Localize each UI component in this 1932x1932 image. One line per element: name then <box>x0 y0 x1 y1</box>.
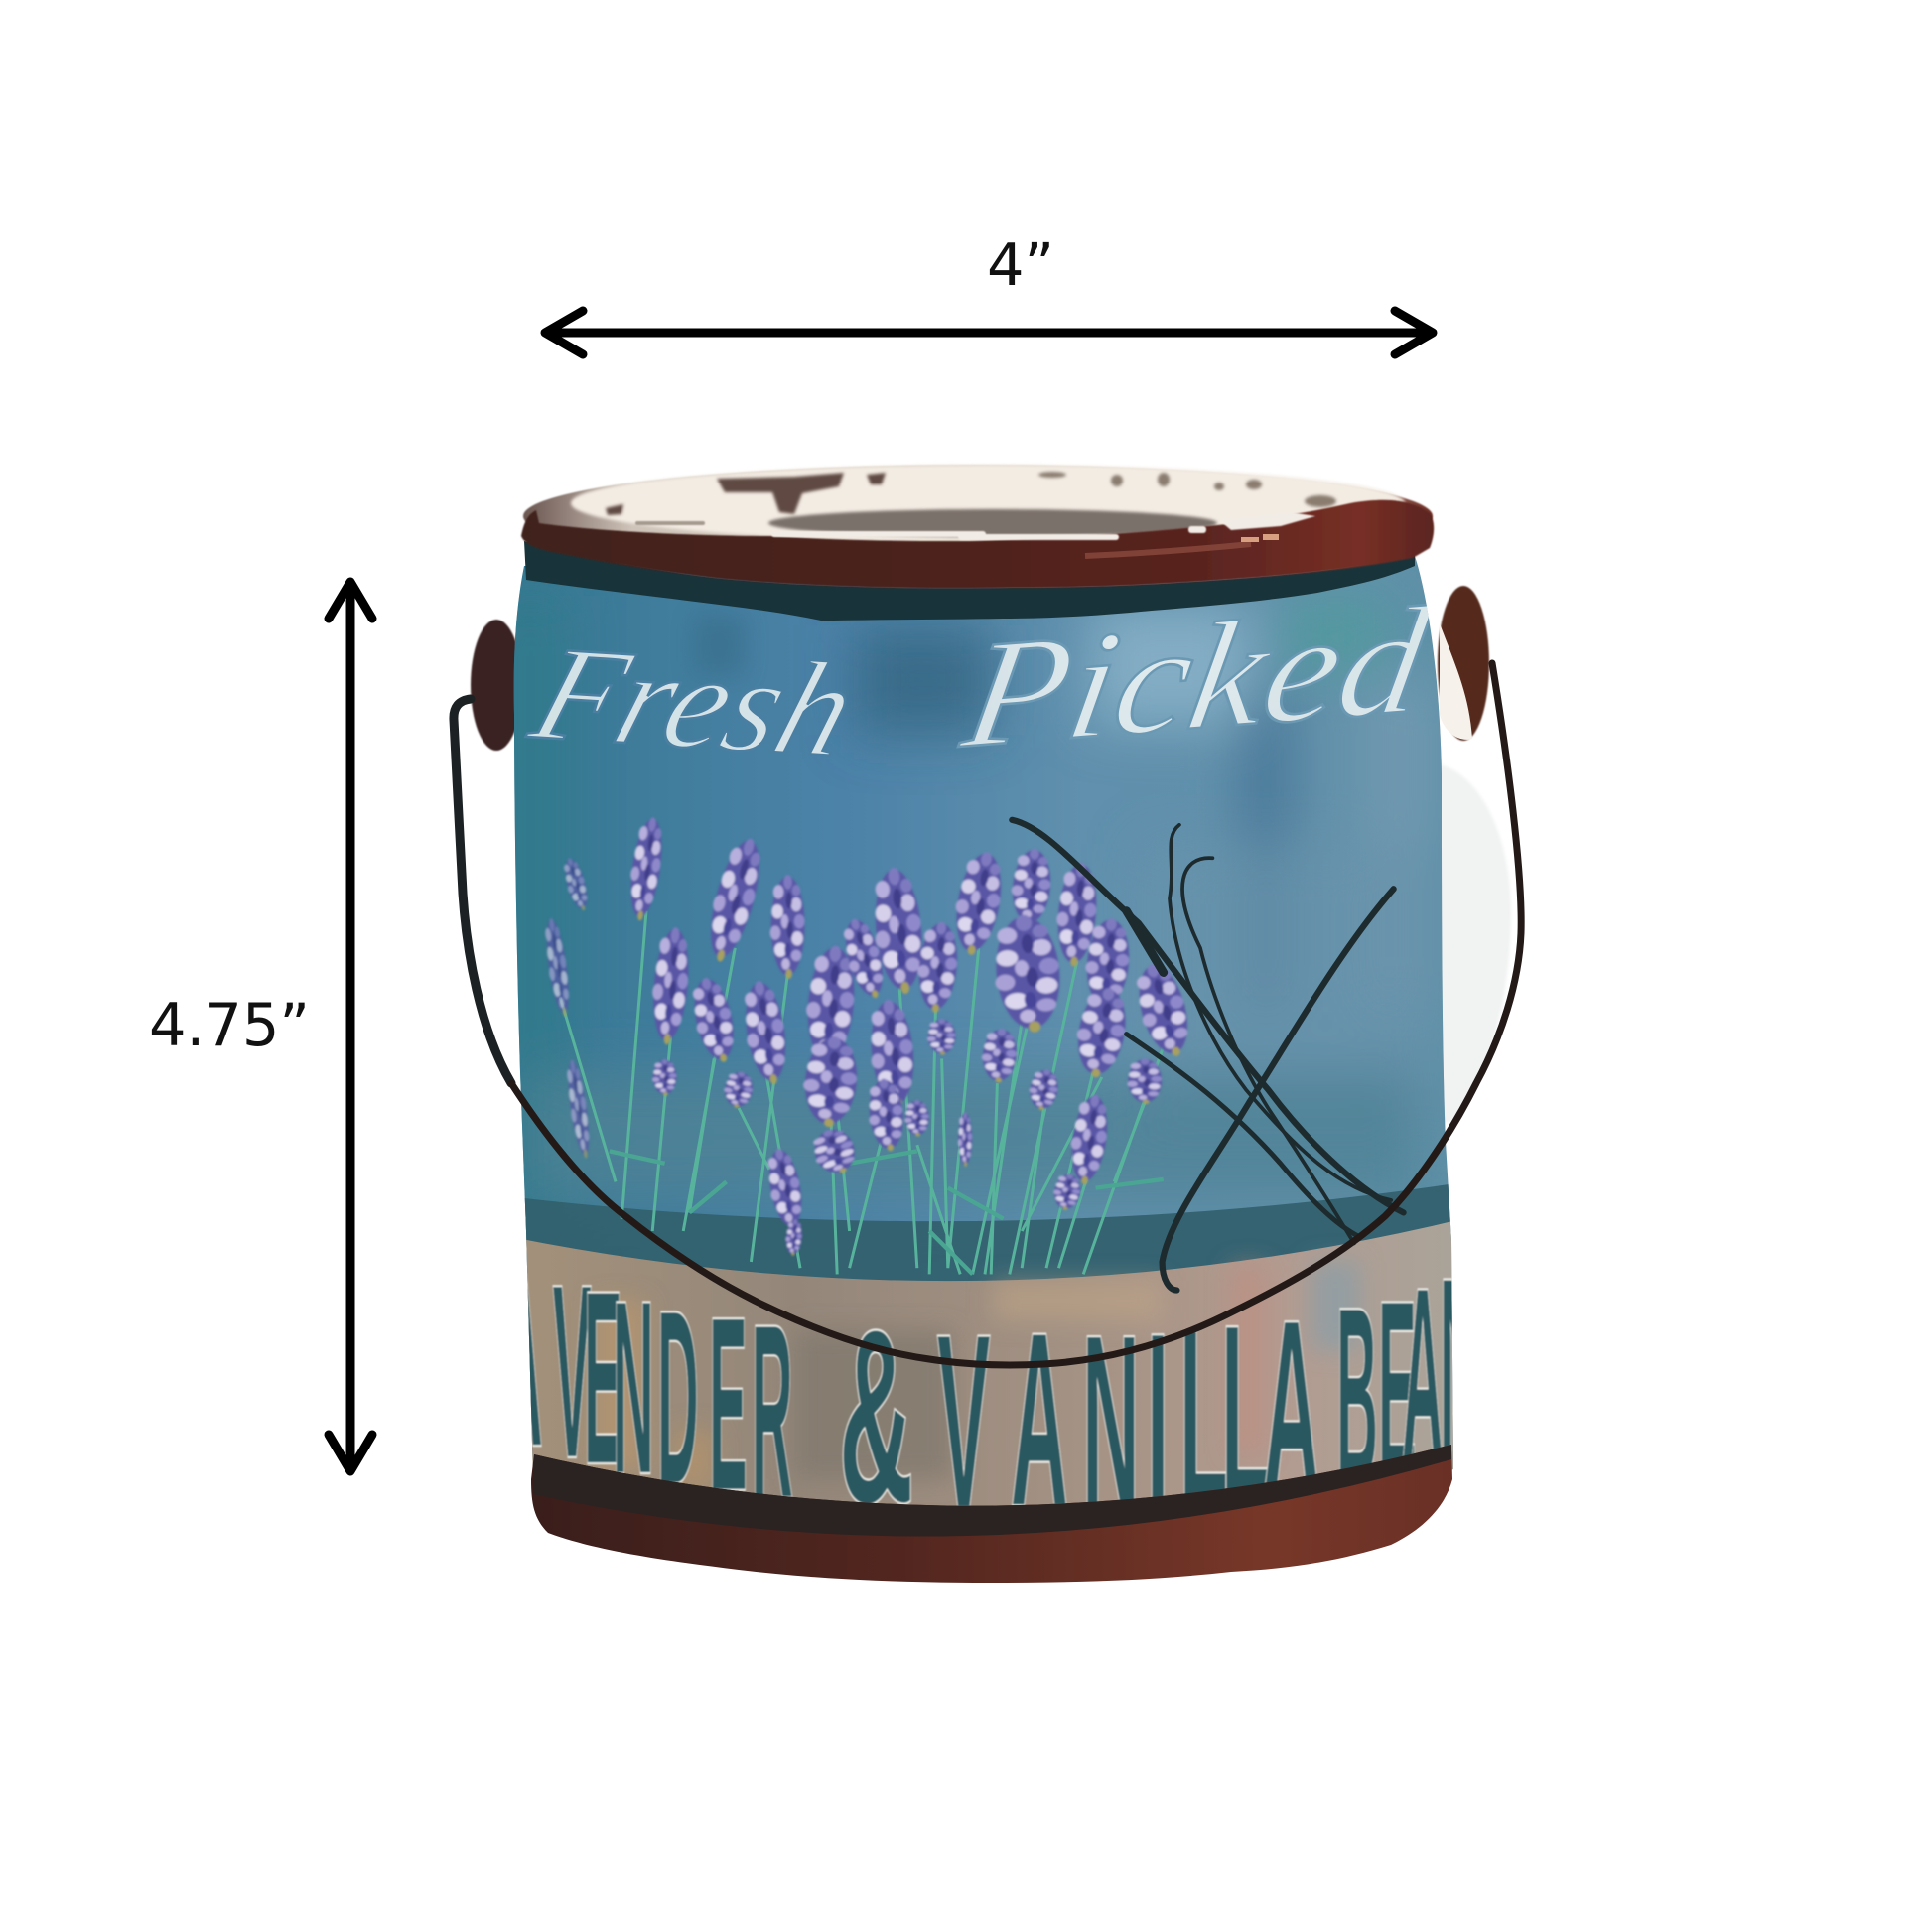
reflection beside can <box>1440 764 1511 1122</box>
tan name band <box>526 1221 1453 1505</box>
label text: Lavender & Vanilla Bean <box>457 1208 1518 1561</box>
product: candle can <box>454 465 1521 1588</box>
lavender stems <box>560 911 1164 1274</box>
dark band under rim <box>524 541 1415 621</box>
label text: Lavender & Vanilla Bean: BEANS <box>1336 1218 1518 1533</box>
label text: Fresh Picked: Fresh <box>516 619 873 784</box>
lavender spikes <box>541 815 1197 1256</box>
label text: Lavender & Vanilla Bean: LAVENDER <box>457 1208 793 1550</box>
rim lip <box>521 500 1434 589</box>
right lug <box>1438 586 1489 741</box>
label text: Lavender & Vanilla Bean: VANILLA <box>937 1270 1320 1561</box>
label text: Fresh Picked <box>524 604 1430 755</box>
left lug <box>471 620 522 751</box>
shelf stripe <box>506 1181 1469 1285</box>
arrow: width <box>545 311 1433 354</box>
label text: Lavender & Vanilla Bean: & <box>839 1280 913 1555</box>
width dimension label: 4” <box>987 230 1054 299</box>
arrow: height <box>329 582 372 1471</box>
label text: Fresh Picked: Picked <box>952 575 1440 780</box>
can body with label artwork <box>457 536 1518 1588</box>
rim back and interior <box>523 465 1433 568</box>
label background <box>514 556 1453 1469</box>
height dimension label: 4.75” <box>149 991 310 1060</box>
vanilla beans <box>1012 820 1404 1291</box>
can base <box>531 1445 1452 1583</box>
wire handle <box>454 663 1521 1365</box>
